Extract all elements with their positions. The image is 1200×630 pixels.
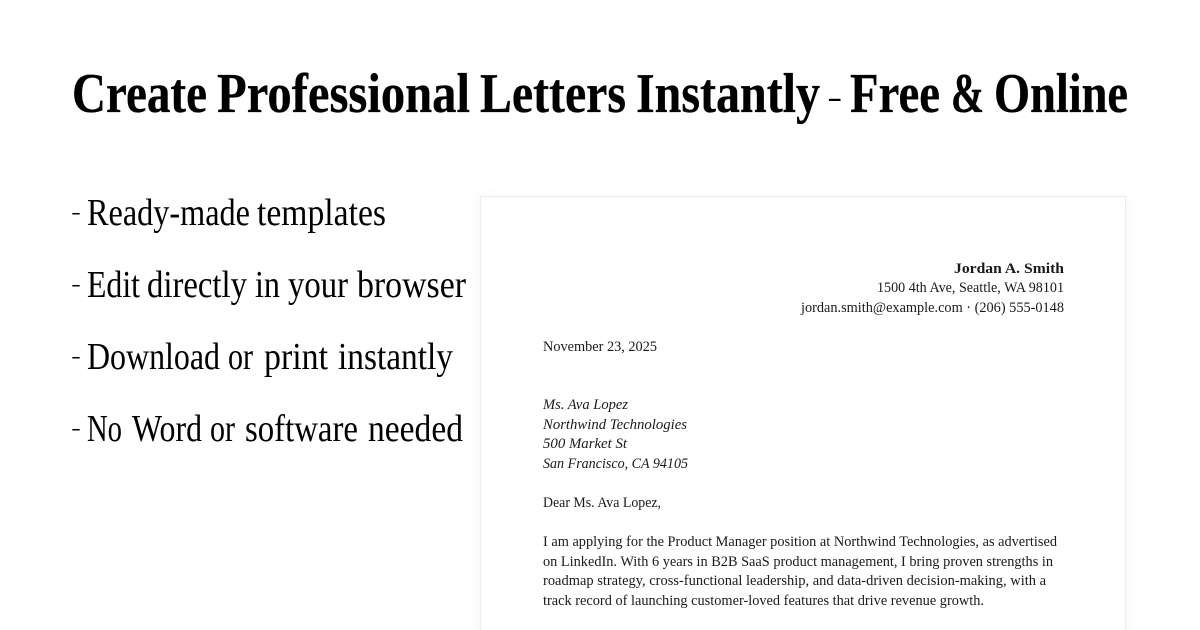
date: November 23, 2025 (543, 339, 657, 355)
feature: no software needed (71, 408, 463, 450)
feature: download or print: instantly (338, 336, 453, 378)
feature: edit in browser: - (71, 274, 81, 296)
feature: edit in browser: your (288, 264, 348, 306)
feature: no software needed: software (245, 408, 358, 450)
title: & (951, 63, 984, 125)
title: - (827, 81, 842, 114)
feature: ready-made templates: Ready-made (87, 192, 250, 234)
sender block: 1500 4th Ave, Seattle, WA 98101 (877, 280, 1064, 296)
feature: edit in browser: in (255, 264, 280, 306)
feature: edit in browser (71, 264, 466, 306)
feature: download or print: Download (87, 336, 220, 378)
recipient block (542, 397, 688, 472)
panel: letter preview (480, 196, 1126, 630)
body paragraph: roadmap strategy, cross-functional leadership, and data-driven decision-making, with a (543, 573, 1047, 589)
feature: ready-made templates (71, 192, 386, 234)
feature: ready-made templates: templates (257, 192, 386, 234)
recipient block: 500 Market St (543, 436, 628, 452)
feature: no software needed: Word (132, 408, 202, 450)
sender block (800, 261, 1064, 316)
body paragraph: I am applying for the Product Manager position at Northwind Technologies, as advertised (543, 534, 1058, 550)
title: Professional (217, 63, 470, 125)
recipient block: Northwind Technologies (542, 417, 687, 433)
title: Free (850, 63, 940, 125)
feature: edit in browser: browser (357, 264, 466, 306)
body paragraph (543, 534, 1058, 609)
feature: no software needed: No (87, 408, 122, 450)
letter page (480, 196, 1126, 630)
body paragraph: on LinkedIn. With 6 years in B2B SaaS product management, I bring proven strengths in (543, 554, 1054, 570)
feature: edit in browser: directly (147, 264, 247, 306)
title: Letters (480, 63, 626, 125)
feature list (71, 192, 466, 450)
title: Online (994, 63, 1128, 125)
title: Instantly (636, 63, 820, 125)
salutation: Dear Ms. Ava Lopez, (543, 495, 661, 511)
sender block: Jordan A. Smith (954, 261, 1064, 277)
recipient block: Ms. Ava Lopez (542, 397, 628, 413)
body paragraph: track record of launching customer-loved features that drive revenue growth. (543, 593, 984, 609)
feature: no software needed: - (71, 418, 81, 440)
sender block: jordan.smith@example.com · (206) 555-0148 (800, 300, 1064, 316)
title: Create (72, 63, 207, 125)
recipient block: San Francisco, CA 94105 (543, 456, 688, 472)
feature: download or print: or (228, 336, 253, 378)
feature: no software needed: needed (368, 408, 463, 450)
title (72, 63, 1128, 125)
feature: download or print: - (71, 346, 81, 368)
feature: download or print: print (264, 336, 328, 378)
feature: download or print (71, 336, 453, 378)
feature: ready-made templates: - (71, 202, 81, 224)
feature: no software needed: or (210, 408, 235, 450)
feature: edit in browser: Edit (87, 264, 140, 306)
